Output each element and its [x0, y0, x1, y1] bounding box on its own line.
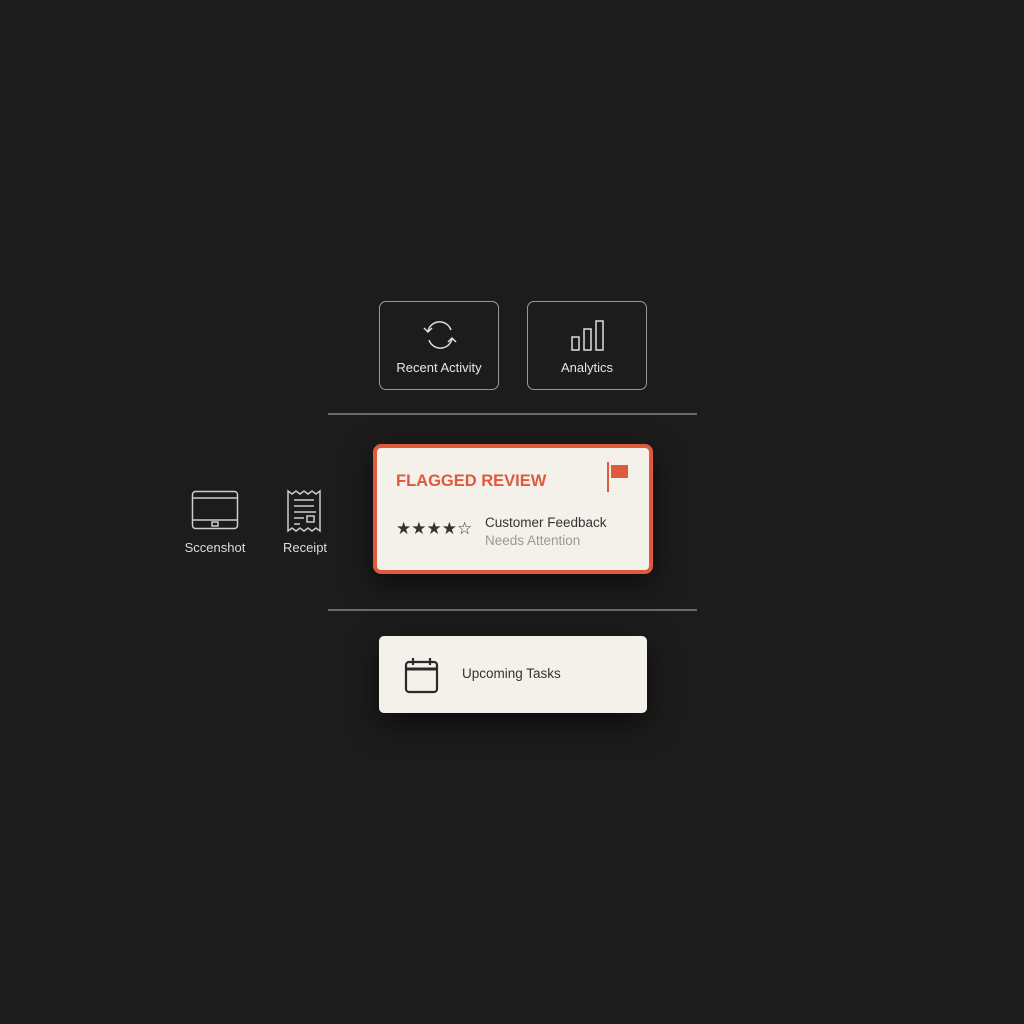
- icon: refresh: [424, 321, 456, 349]
- icon: bar chart: [571, 320, 604, 351]
- text: customer feedback: [485, 515, 607, 548]
- text: customer feedback: Needs Attention: [485, 533, 580, 548]
- stars: ★★★★☆: [396, 519, 472, 538]
- card: upcoming tasks: [379, 636, 647, 713]
- tile: recent activity: [379, 301, 499, 390]
- text: customer feedback: Customer Feedback: [485, 515, 607, 530]
- card: upcoming tasks: Upcoming Tasks: [462, 666, 561, 681]
- icon: screenshot: Sccenshot: [185, 540, 245, 555]
- tile: recent activity: Recent Activity: [396, 360, 482, 375]
- icon: flag: [607, 462, 628, 492]
- card: flagged review: [373, 444, 653, 574]
- icon: calendar: [404, 658, 438, 694]
- icon: screenshot: [185, 490, 246, 555]
- tile: analytics: Analytics: [561, 360, 613, 375]
- icon: receipt: [283, 490, 327, 555]
- icon: receipt: Receipt: [283, 540, 327, 555]
- heading: FLAGGED REVIEW: [396, 472, 546, 490]
- tile: analytics: [527, 301, 647, 390]
